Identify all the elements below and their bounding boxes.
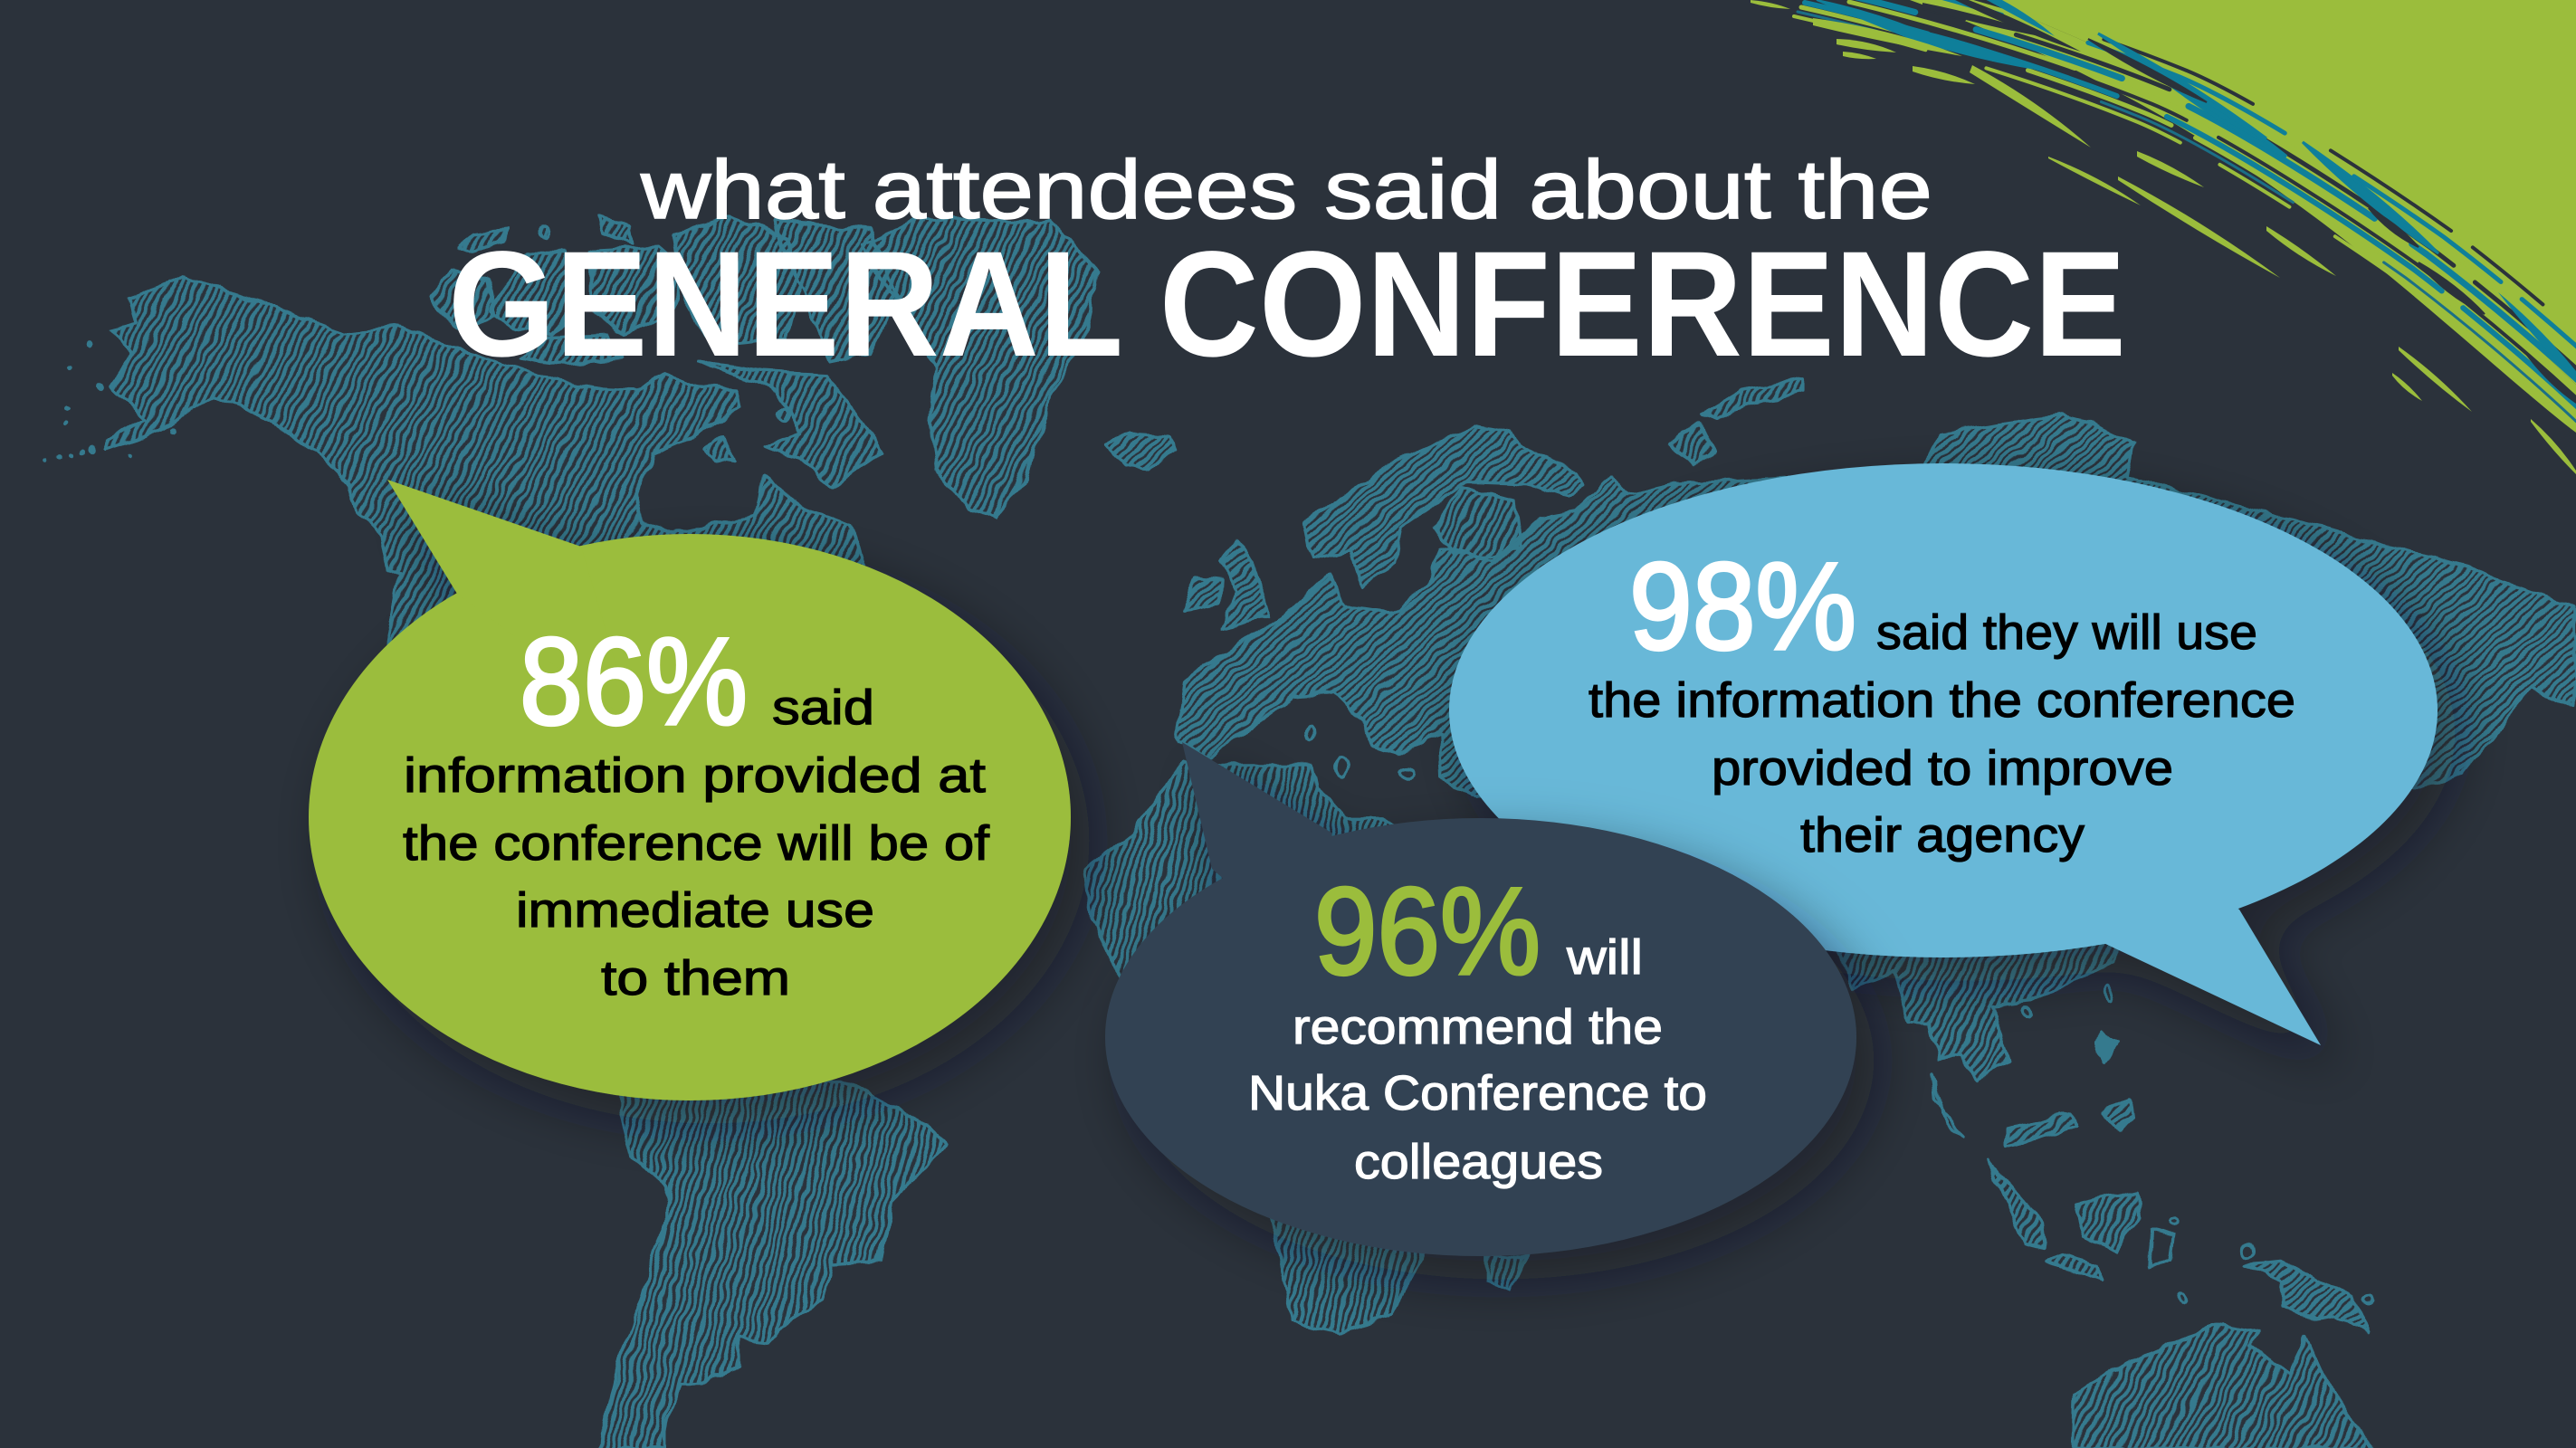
- Africa: [1084, 764, 1445, 1332]
- Quebec and Labrador: [698, 361, 883, 486]
- green bubble text: said: [772, 681, 874, 735]
- green speech shape: [309, 480, 1071, 1100]
- green outer strokes: [1751, 0, 2576, 474]
- title: [448, 144, 2126, 388]
- Iceland: [1104, 433, 1177, 468]
- blue bubble text: their agency: [1800, 808, 2085, 862]
- blue bubble text: said they will use: [1876, 605, 2257, 660]
- green bubble text: [403, 613, 990, 1005]
- green bubble text: to them: [601, 951, 790, 1005]
- blue bubble text: provided to improve: [1712, 741, 2173, 795]
- dark bubble text: colleagues: [1354, 1135, 1603, 1189]
- Finland and Baltic: [1434, 488, 1520, 558]
- dark bubble text: 96%: [1314, 862, 1541, 1001]
- Indonesian and Pacific islands: [1932, 986, 2374, 1334]
- green brush band: [1910, 0, 2576, 433]
- green bubble text: 86%: [520, 613, 748, 751]
- title line 2: GENERAL CONFERENCE: [448, 221, 2126, 388]
- Mediterranean islands: [1306, 724, 1413, 776]
- bubble: 96% dark: [1105, 742, 1856, 1256]
- dark bubble text: will: [1566, 930, 1643, 985]
- dark bubble text: [1248, 862, 1707, 1189]
- Madagascar: [1488, 1255, 1526, 1290]
- bubble: 98% blue: [1449, 463, 2438, 1045]
- Arctic Russian islands: [1671, 379, 1804, 465]
- long dashed brush strands: [1794, 0, 2576, 433]
- brush stroke swoosh: [1751, 0, 2576, 474]
- Alaskan islands: [43, 340, 174, 463]
- Canadian Arctic islands: [432, 217, 895, 462]
- green bubble text: immediate use: [516, 883, 874, 938]
- solid green corner: [1982, 0, 2576, 385]
- title line 1: what attendees said about the: [640, 144, 1932, 236]
- Britain: [1222, 542, 1270, 629]
- bubble: 86% green: [309, 480, 1071, 1100]
- Eurasia: [1177, 415, 2576, 796]
- Scandinavia: [1304, 425, 1584, 588]
- green bubble text: the conference will be of: [403, 816, 990, 871]
- dark bubble text: Nuka Conference to: [1248, 1066, 1707, 1120]
- Greenland: [863, 217, 1097, 518]
- dark speech shape: [1105, 742, 1856, 1256]
- green bubble text: information provided at: [404, 748, 986, 803]
- South East Asia: [1832, 937, 2119, 1079]
- blue bubble text: the information the conference: [1589, 673, 2295, 728]
- Australia: [2074, 1324, 2374, 1448]
- North America: [105, 276, 864, 690]
- blue bubble text: [1589, 538, 2295, 862]
- blue speech shape: [1449, 463, 2438, 1045]
- dark bubble text: recommend the: [1293, 1000, 1663, 1054]
- teal and dark strokes: [1817, 0, 2576, 404]
- South America: [599, 1079, 945, 1448]
- blue bubble text: 98%: [1629, 538, 1856, 676]
- Ireland: [1183, 576, 1221, 611]
